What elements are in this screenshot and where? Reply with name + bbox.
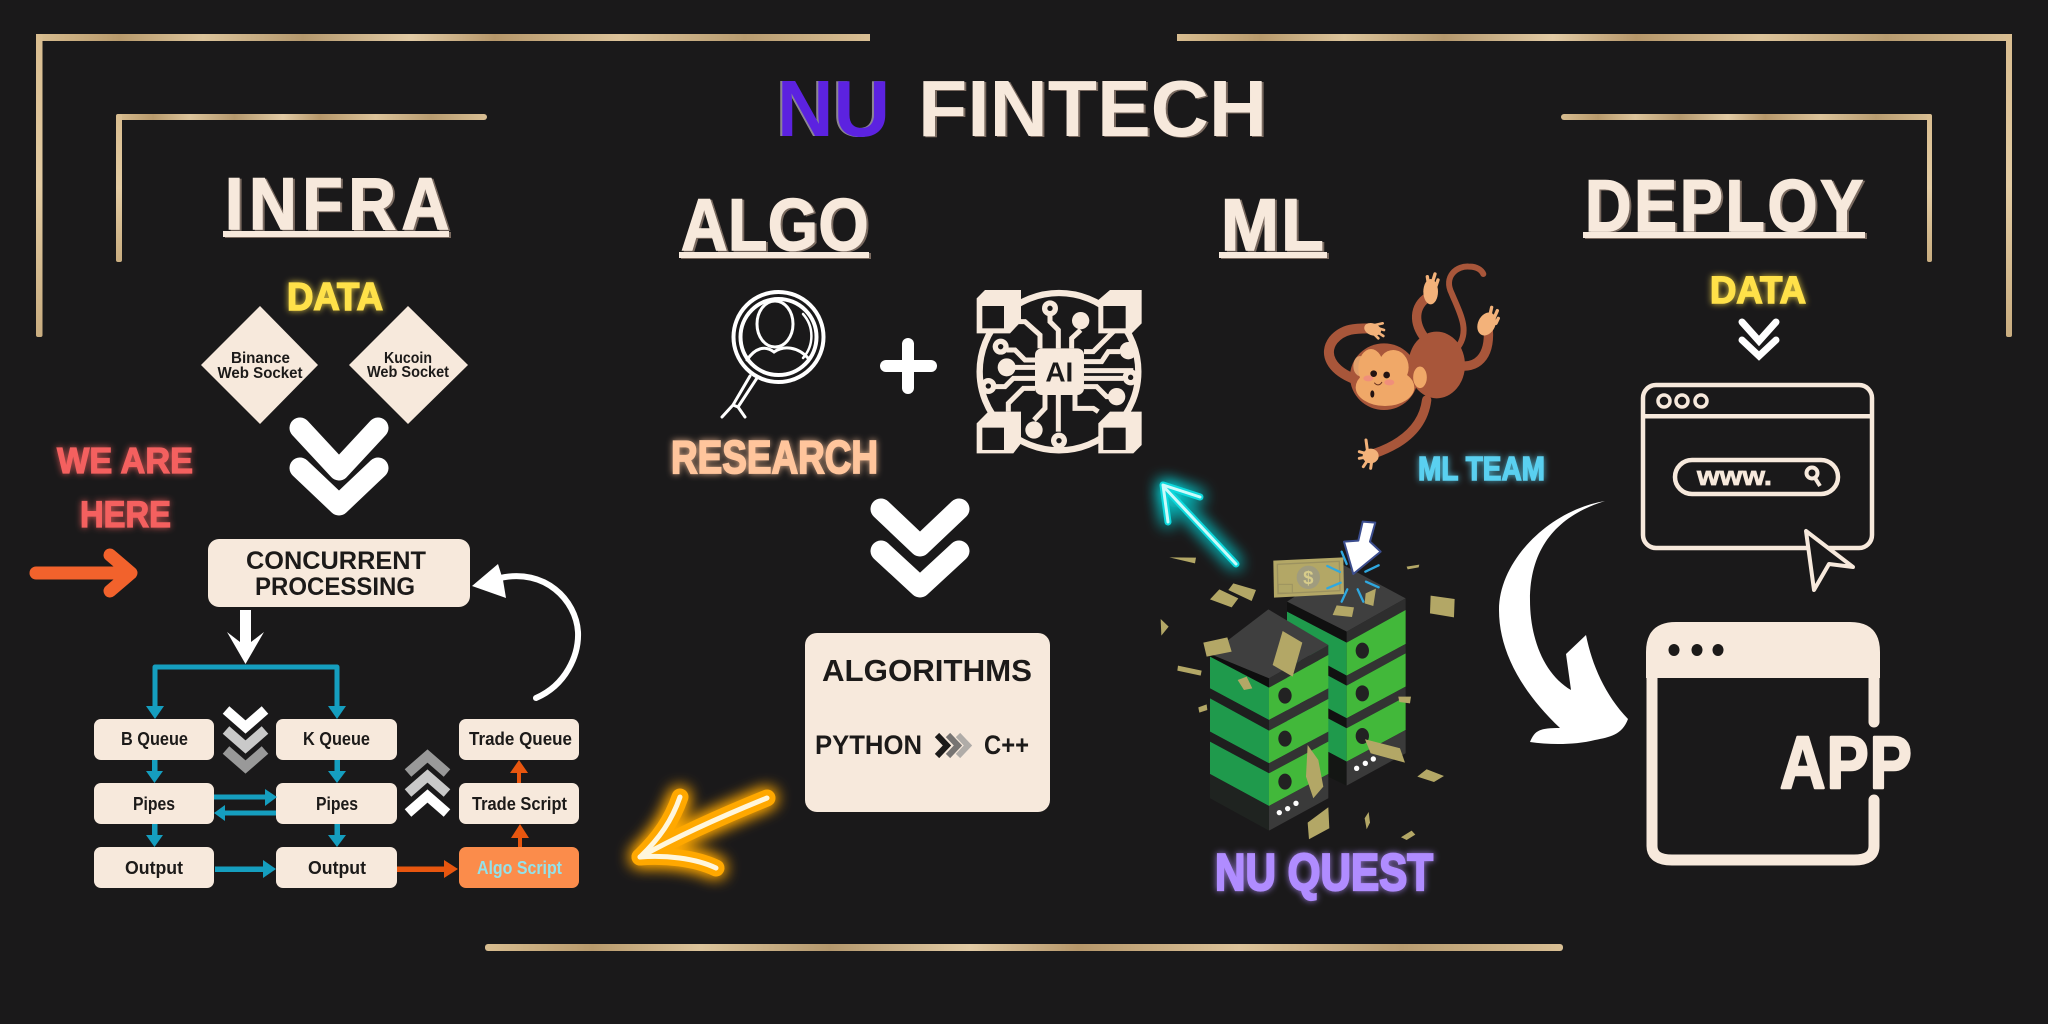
icon: browser window <box>1643 385 1872 548</box>
box: algo script: Algo Script <box>477 858 562 878</box>
sub-icon: flying bills <box>1161 557 1455 840</box>
frame: inner left corner <box>116 114 487 262</box>
icon: triple chevron up <box>408 756 447 813</box>
panel: algo <box>671 184 1142 812</box>
frame: inner right corner <box>1561 114 1932 262</box>
icon: AI chip <box>977 290 1142 453</box>
label: ml team: ML TEAM <box>1418 450 1545 487</box>
box: trade queue <box>459 719 579 760</box>
icon: small triple chevron right <box>937 735 968 756</box>
box: output left: Output <box>125 858 183 878</box>
heading: ml: ML <box>1221 185 1324 266</box>
label: data: DATA <box>1710 270 1806 312</box>
box: pipes left <box>94 783 214 824</box>
heading: infra: INFRA <box>225 163 449 245</box>
label: research: RESEARCH <box>671 431 878 483</box>
icon: triple chevron down <box>226 710 265 767</box>
arrows: blue flow <box>146 760 346 878</box>
box: pipes right: Pipes <box>316 794 358 814</box>
icon: monkey <box>1329 267 1500 468</box>
icon: search glass <box>1806 468 1820 486</box>
label: we are here: WE ARE <box>57 440 193 481</box>
box: b queue: B Queue <box>121 729 188 749</box>
box: pipes left: Pipes <box>133 794 175 814</box>
diamond: kucoin web socket: Web Socket <box>367 364 449 381</box>
box: k queue <box>276 719 397 760</box>
box: concurrent processing: CONCURRENT <box>246 547 426 575</box>
box: b queue <box>94 719 214 760</box>
sub-icon: click cursor <box>1344 522 1381 574</box>
frame: bottom bar <box>485 944 1563 951</box>
box: trade queue: Trade Queue <box>469 729 572 749</box>
title: NU <box>777 64 890 153</box>
box: algorithms: C++ <box>984 730 1029 760</box>
box: algo script <box>459 847 579 888</box>
box: concurrent processing <box>208 539 470 607</box>
box: concurrent processing: PROCESSING <box>255 573 415 601</box>
label: we are here <box>57 440 193 535</box>
box: algorithms <box>805 633 1050 812</box>
box: pipes right <box>276 783 397 824</box>
heading: deploy: DEPLOY <box>1585 165 1863 247</box>
diamond: kucoin web socket <box>349 306 468 424</box>
box: algorithms: ALGORITHMS <box>822 653 1032 688</box>
icon: app window <box>1646 622 1912 860</box>
icon: server towers with money <box>1161 522 1455 840</box>
panel: ml <box>1161 185 1545 902</box>
frame: outer right corner <box>1177 34 2012 337</box>
sub-icon: monkey hands <box>1359 274 1500 468</box>
connector: blue splitter <box>146 667 346 719</box>
icon: app window: APP <box>1780 721 1912 804</box>
heading: algo: ALGO <box>681 184 868 266</box>
icon: plus <box>880 338 937 394</box>
icon: browser window: www. <box>1696 461 1772 491</box>
label: data: DATA <box>287 276 383 319</box>
sub-icon: large dollar bill: $ <box>1303 567 1314 588</box>
arrow: large white curve <box>1499 501 1628 744</box>
icon: small double chevron <box>1742 322 1776 356</box>
box: output left <box>94 847 214 888</box>
diamond: kucoin web socket: Kucoin <box>384 350 432 367</box>
diamond: binance web socket: Binance <box>231 350 290 367</box>
box: k queue: K Queue <box>303 729 370 749</box>
panel: infra <box>36 163 579 888</box>
sub-icon: left tower <box>1210 609 1328 831</box>
diamond: binance web socket: Web Socket <box>218 365 302 382</box>
label: we are here: HERE <box>80 494 171 535</box>
sub-icon: right tower <box>1287 565 1406 786</box>
sub-icon: large dollar bill <box>1277 561 1340 594</box>
box: output right <box>276 847 397 888</box>
box: trade script <box>459 783 579 824</box>
icon: AI chip: AI <box>1045 357 1073 388</box>
box: trade script: Trade Script <box>472 794 567 814</box>
box: output right: Output <box>308 858 366 878</box>
icon: double chevron down <box>300 428 378 505</box>
sub-icon: click sparks <box>1327 552 1379 602</box>
search bar <box>1675 460 1838 494</box>
panel: deploy <box>1499 165 1912 860</box>
icon: magnifier with person <box>722 292 824 417</box>
icon: cursor <box>1806 531 1853 590</box>
arrow: white down <box>227 610 264 664</box>
arrow: yellow neon <box>640 797 767 868</box>
arrow: orange pointer <box>36 555 131 591</box>
arrow: white feedback curve <box>472 564 578 698</box>
arrows: orange flow <box>397 760 529 878</box>
box: algorithms: PYTHON <box>815 730 922 760</box>
arrow: cyan neon <box>1163 485 1236 564</box>
label: nu quest: NU QUEST <box>1215 844 1433 902</box>
frame: outer left corner <box>36 34 870 337</box>
diamond: binance web socket <box>201 306 318 424</box>
title: FINTECH <box>918 64 1267 153</box>
icon: double chevron down <box>881 509 959 587</box>
